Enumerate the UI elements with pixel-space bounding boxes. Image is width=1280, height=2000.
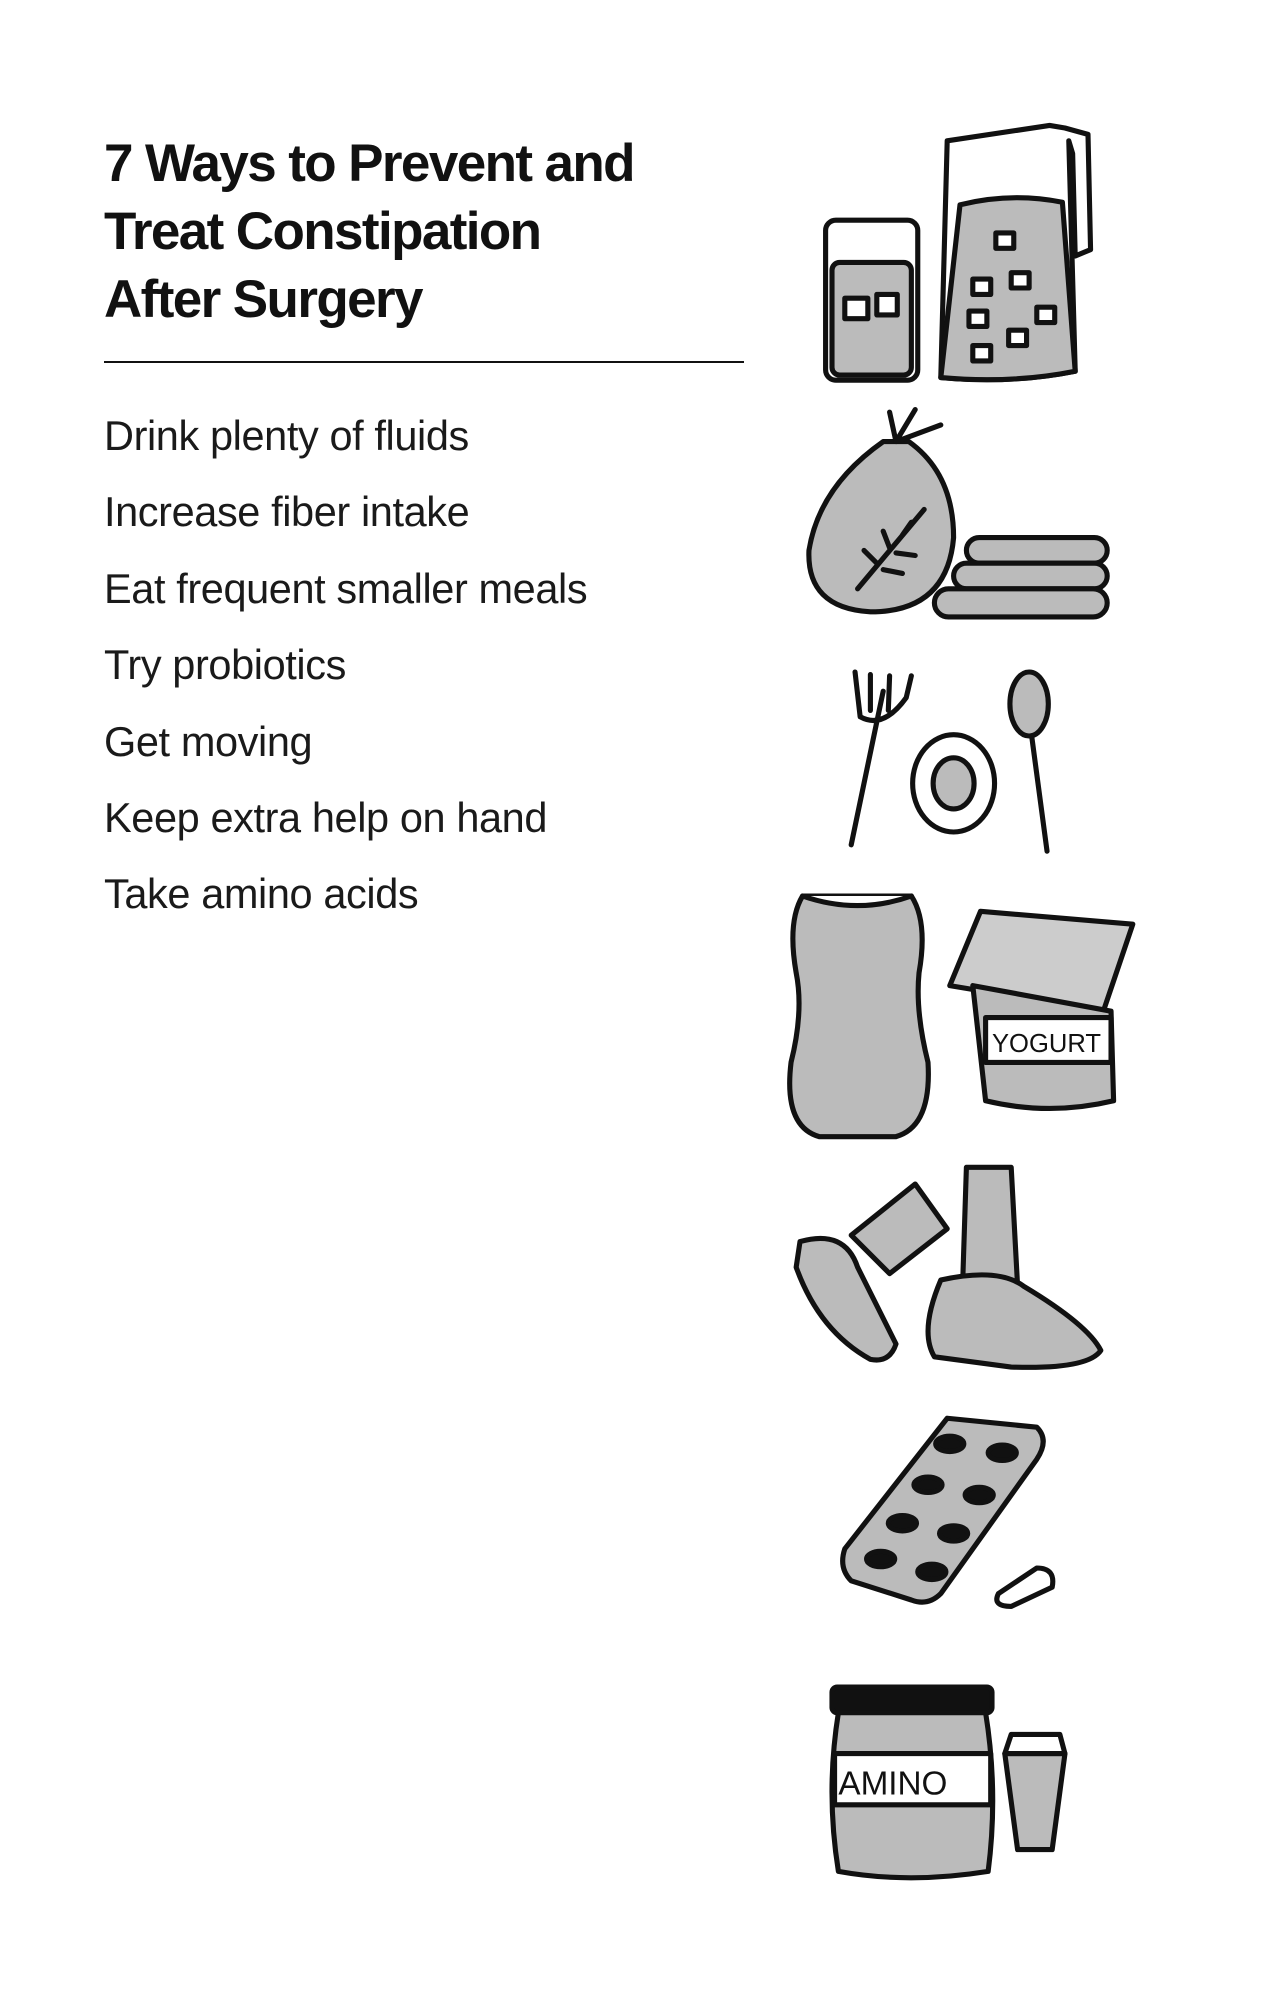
icon: amino acid jar and shaker: [832, 1687, 1065, 1878]
tip 4: Try probiotics: [104, 641, 346, 688]
icon: probiotic bottle and yogurt: YOGURT: [992, 1030, 1101, 1058]
tip 7: Take amino acids: [104, 870, 418, 917]
icon: glass and pitcher: [826, 125, 1091, 380]
title: Treat Constipation: [104, 202, 540, 261]
tip 5: Get moving: [104, 718, 312, 765]
title: 7 Ways to Prevent and: [104, 134, 634, 193]
tip 1: Drink plenty of fluids: [104, 412, 469, 459]
title: After Surgery: [104, 270, 422, 329]
icon: amino acid jar and shaker: AMINO: [838, 1766, 947, 1803]
icon: probiotic bottle and yogurt: [790, 896, 1133, 1137]
tip 2: Increase fiber intake: [104, 488, 469, 535]
title: [104, 134, 634, 329]
icon: fiber bag and crackers: [809, 410, 1107, 617]
tip 6: Keep extra help on hand: [104, 794, 547, 841]
tip 3: Eat frequent smaller meals: [104, 565, 587, 612]
icon: walking feet: [796, 1167, 1101, 1367]
icon: pill blister pack: [843, 1418, 1053, 1606]
list of tips: [104, 412, 587, 917]
icon: fork, plate and spoon: [851, 672, 1048, 851]
